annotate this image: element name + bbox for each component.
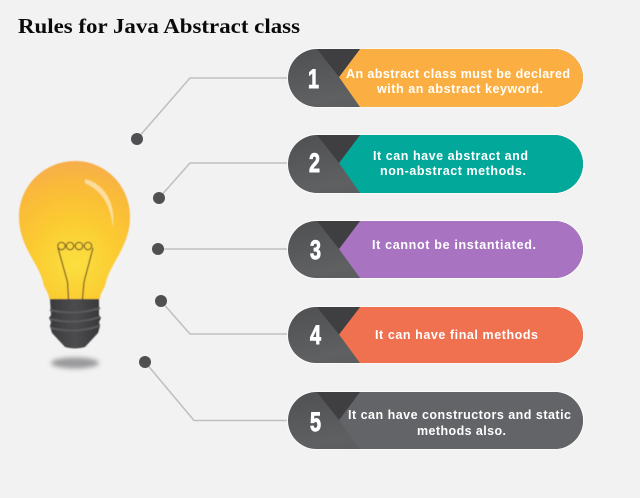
panel: rule 2 [287, 134, 584, 194]
panel: rule 5 [287, 391, 584, 450]
rule 4 text: It can have final methods [375, 328, 538, 342]
title: Rules for Java Abstract class [18, 14, 300, 38]
panel: rule 1 [287, 48, 584, 108]
rule 3 text: It cannot be instantiated. [372, 238, 536, 252]
connector 1 [131, 78, 288, 145]
connector 3 [152, 243, 288, 255]
rule 5 text: methods also. [417, 424, 506, 438]
connector 5 [139, 356, 288, 420]
screw base [49, 299, 101, 348]
rule 1 text: An abstract class must be declared [346, 67, 570, 81]
number 1: 1 [308, 64, 319, 94]
rule 5 text: It can have constructors and static [348, 408, 571, 422]
bulb shadow [51, 358, 99, 368]
rule 2 text: non-abstract methods. [380, 164, 526, 178]
rule 1 text: with an abstract keyword. [376, 82, 543, 96]
number 3: 3 [310, 235, 321, 265]
panel: rule 4 [287, 306, 584, 364]
rule 1 text [346, 67, 570, 96]
panel: rule 3 [287, 220, 584, 279]
icon: light bulb [19, 161, 130, 368]
number 4: 4 [310, 320, 321, 350]
connector 2 [153, 163, 288, 204]
connector 4 [155, 295, 288, 334]
number 2: 2 [309, 148, 320, 178]
glass highlight [85, 179, 113, 228]
rule 2 text [373, 149, 528, 178]
rule 5 text [348, 408, 571, 438]
bulb glass [19, 161, 130, 299]
number 5: 5 [310, 407, 321, 437]
rule 2 text: It can have abstract and [373, 149, 528, 163]
filament [58, 242, 93, 299]
